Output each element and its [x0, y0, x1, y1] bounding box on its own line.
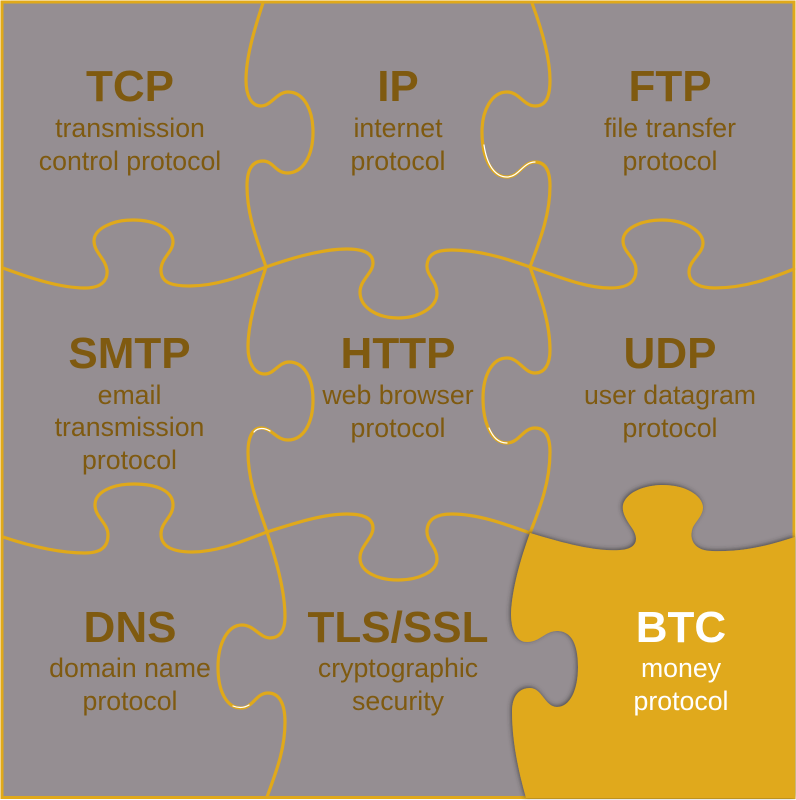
seam: far right horizontal — [530, 220, 794, 288]
label: UDP: user datagram — [584, 380, 756, 410]
label: TCP: control protocol — [39, 146, 221, 176]
seam: middle right vertical — [483, 267, 550, 533]
seam: lower middle horizontal — [267, 514, 530, 580]
label: IP: protocol — [351, 146, 445, 176]
label: TCP: transmission — [55, 113, 205, 143]
label: UDP — [584, 329, 756, 443]
label: DNS — [49, 603, 211, 716]
label: BTC: money — [641, 653, 722, 683]
label: DNS: protocol — [83, 686, 177, 716]
label: FTP: FTP — [628, 62, 712, 111]
label: IP: internet — [353, 113, 443, 143]
label: SMTP: SMTP — [68, 329, 191, 378]
seam: upper right vertical — [482, 3, 550, 267]
label: TLS/SSL: cryptographic — [318, 653, 478, 683]
label: TCP: TCP — [86, 62, 174, 111]
label: BTC — [634, 603, 728, 716]
label: IP: IP — [377, 62, 419, 111]
label: IP — [351, 62, 445, 176]
label: SMTP: protocol — [82, 445, 177, 475]
label: UDP: UDP — [624, 329, 716, 378]
label: FTP: file transfer — [604, 113, 736, 143]
label: DNS: domain name — [49, 653, 211, 683]
label: SMTP: email — [98, 380, 161, 410]
label: UDP: protocol — [623, 413, 717, 443]
seam: upper left vertical — [246, 3, 313, 267]
label: HTTP — [321, 329, 474, 443]
label: TLS/SSL: security — [352, 686, 445, 716]
label: DNS: DNS — [84, 603, 176, 652]
seam highlights — [233, 145, 535, 707]
seam: lower left horizontal — [3, 484, 267, 553]
seam: upper left horizontal — [3, 220, 266, 288]
seam: middle left vertical — [248, 267, 313, 532]
label: TCP — [39, 62, 221, 176]
label: TLS/SSL — [308, 603, 488, 716]
label: FTP: protocol — [623, 146, 717, 176]
label: HTTP: protocol — [351, 413, 445, 443]
seam: lower left vertical — [218, 532, 285, 797]
label: SMTP: transmission — [55, 412, 204, 442]
seam: upper right horizontal — [266, 249, 530, 318]
label: BTC: protocol — [634, 686, 728, 716]
label: HTTP: HTTP — [341, 329, 455, 378]
label: HTTP: web browser — [321, 380, 474, 410]
label: BTC: BTC — [636, 603, 726, 652]
label: SMTP — [55, 329, 204, 475]
label: FTP — [604, 62, 736, 176]
label: TLS/SSL: TLS/SSL — [308, 603, 488, 652]
BTC puzzle piece — [511, 485, 795, 798]
